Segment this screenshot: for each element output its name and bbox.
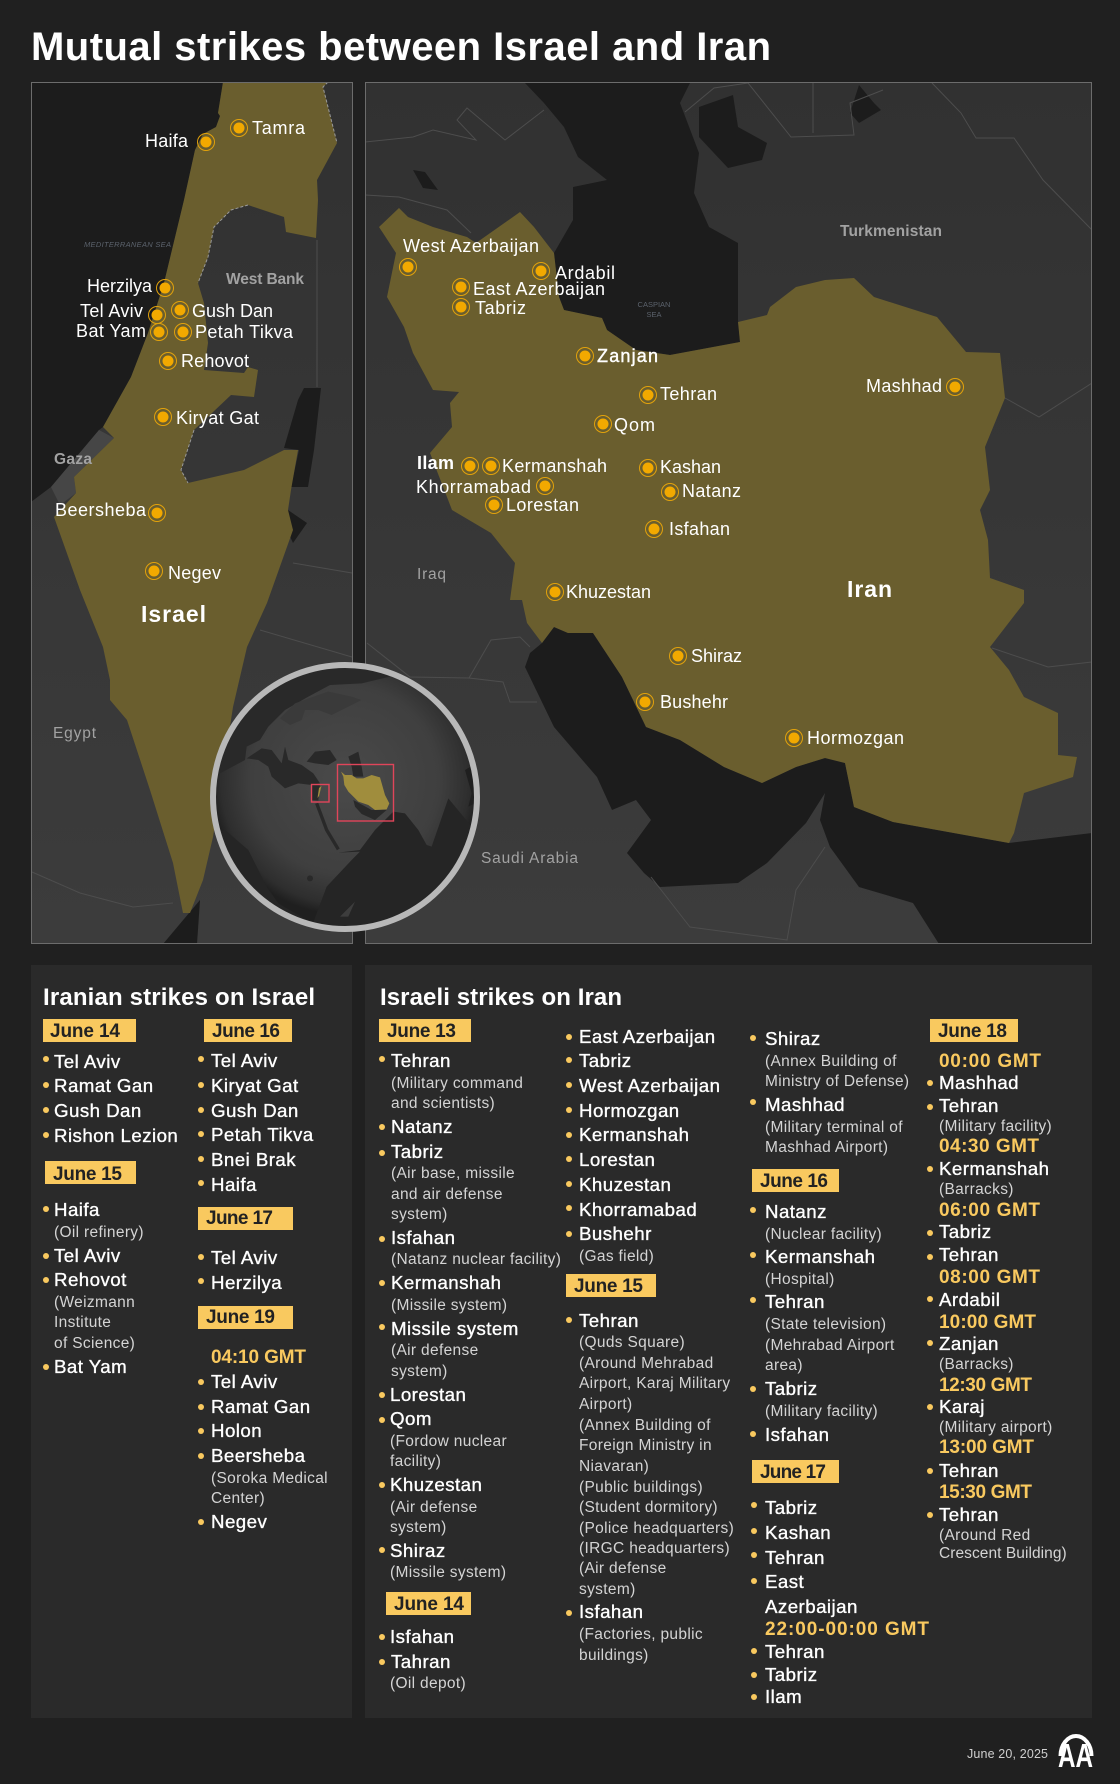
list: June 16 bbox=[750, 1169, 895, 1445]
marker group: Israeli cities: Tel Aviv bbox=[80, 301, 143, 321]
list: June 15: (Factories, public bbox=[579, 1626, 703, 1643]
list: June 15: Ministry of Defense) bbox=[765, 1073, 909, 1090]
list: June 18: (Barracks) bbox=[939, 1181, 1014, 1198]
marker group: Iranian cities: Qom bbox=[614, 415, 655, 435]
list: June 19: 04:10 GMT bbox=[211, 1347, 306, 1368]
list: June 14: Rishon Lezion bbox=[54, 1125, 178, 1146]
marker group: Israeli cities: Haifa bbox=[145, 131, 189, 151]
list: June 13 first column: (Military command bbox=[391, 1075, 523, 1092]
locator box: Israel bbox=[312, 784, 329, 802]
marker group: Iranian cities bbox=[400, 236, 964, 748]
list: June 15: Bat Yam bbox=[54, 1356, 127, 1377]
list: June 13 first column bbox=[379, 1019, 561, 1581]
neighbour labels: Gaza bbox=[54, 451, 92, 468]
list: June 15: Institute bbox=[54, 1314, 111, 1331]
list: June 15: (IRGC headquarters) bbox=[579, 1540, 730, 1557]
list: June 19: Beersheba bbox=[211, 1445, 306, 1466]
list: June 16: Natanz bbox=[765, 1201, 827, 1222]
list: June 13 first column: system) bbox=[391, 1363, 448, 1380]
marker group: Israeli cities: Negev bbox=[168, 563, 221, 583]
list: June 13 continued: East Azerbaijan bbox=[579, 1026, 716, 1047]
list: June 16: Bnei Brak bbox=[211, 1149, 296, 1170]
list: June 13 continued: Kermanshah bbox=[579, 1124, 689, 1145]
list: June 16: Haifa bbox=[211, 1174, 257, 1195]
list: June 15: Rehovot bbox=[54, 1269, 127, 1290]
list: June 13 first column: Tehran bbox=[391, 1050, 451, 1071]
list: June 13 first column: Khuzestan bbox=[390, 1474, 482, 1495]
list: June 18: Zanjan bbox=[939, 1333, 999, 1354]
list: June 13 first column: Natanz bbox=[391, 1116, 453, 1137]
list: June 17: Tehran bbox=[765, 1641, 825, 1662]
list: June 18: Mashhad bbox=[939, 1072, 1019, 1093]
list: June 16 bbox=[198, 1019, 314, 1195]
inset globe bbox=[205, 660, 482, 930]
marker group: Iranian cities: Lorestan bbox=[506, 495, 579, 515]
list: June 15: of Science) bbox=[54, 1335, 135, 1352]
heading: Israeli strikes on Iran bbox=[380, 984, 622, 1011]
list: June 19: June 19 bbox=[206, 1307, 275, 1328]
marker group: Iranian cities: Kermanshah bbox=[502, 456, 607, 476]
list: June 14 bbox=[379, 1592, 471, 1692]
list: June 15: June 15 bbox=[574, 1276, 643, 1297]
list: June 13 first column: facility) bbox=[390, 1453, 441, 1470]
list: June 16: (Nuclear facility) bbox=[765, 1226, 882, 1243]
list: June 18: Tehran bbox=[939, 1095, 999, 1116]
sea label: SEA bbox=[646, 310, 662, 319]
list: June 18: 10:00 GMT bbox=[939, 1312, 1036, 1333]
marker group: Israeli cities: Beersheba bbox=[55, 500, 147, 520]
list: June 17 bbox=[751, 1460, 929, 1707]
locator box: Iran bbox=[338, 764, 394, 821]
list: June 17: Kashan bbox=[765, 1522, 831, 1543]
marker group: Iranian cities: Tehran bbox=[660, 384, 717, 404]
list: June 18: Tehran bbox=[939, 1244, 999, 1265]
list: June 16: (Military facility) bbox=[765, 1403, 878, 1420]
list: June 16: (State television) bbox=[765, 1316, 886, 1333]
marker group: Iranian cities: East Azerbaijan bbox=[473, 279, 605, 299]
globe: Iran highlight bbox=[341, 772, 389, 810]
list: June 15: (Air defense bbox=[579, 1560, 667, 1577]
list: June 13 first column: system) bbox=[390, 1519, 447, 1536]
list: June 13 continued: Tabriz bbox=[579, 1050, 632, 1071]
list: June 14: Ramat Gan bbox=[54, 1075, 154, 1096]
marker group: Iranian cities: Kashan bbox=[660, 457, 721, 477]
marker group: Iranian cities: Ilam bbox=[417, 453, 454, 473]
list: June 13 continued: Hormozgan bbox=[579, 1100, 680, 1121]
list: June 18: Tehran bbox=[939, 1460, 999, 1481]
list: June 15: (Around Mehrabad bbox=[579, 1355, 714, 1372]
list: June 15: Haifa bbox=[54, 1199, 100, 1220]
sea label: MEDITERRANEAN SEA bbox=[84, 240, 171, 249]
marker group: Israeli cities: Tamra bbox=[252, 118, 306, 138]
list: June 13 first column: and scientists) bbox=[391, 1095, 495, 1112]
marker group: Israeli cities: Gush Dan bbox=[192, 301, 273, 321]
list: June 15 bbox=[43, 1161, 144, 1377]
country label: Israel: Israel bbox=[141, 601, 206, 627]
marker group: Israeli cities: Petah Tikva bbox=[195, 322, 294, 342]
marker group: Israeli cities: Herzilya bbox=[87, 276, 153, 296]
list: June 16: Petah Tikva bbox=[211, 1124, 314, 1145]
list: June 13 continued: Lorestan bbox=[579, 1149, 655, 1170]
list: June 15: Mashhad bbox=[765, 1094, 845, 1115]
list: June 13 first column: system) bbox=[391, 1206, 448, 1223]
list: June 13 first column: (Missile system) bbox=[391, 1297, 507, 1314]
list: June 19: Center) bbox=[211, 1490, 265, 1507]
list: June 15: Foreign Ministry in bbox=[579, 1437, 712, 1454]
list: June 19 bbox=[198, 1306, 328, 1532]
marker group: Iranian cities: Shiraz bbox=[691, 646, 742, 666]
list: June 17: Azerbaijan bbox=[765, 1596, 858, 1617]
list: June 13 first column: Shiraz bbox=[390, 1540, 446, 1561]
list: June 16: Gush Dan bbox=[211, 1100, 299, 1121]
neighbour labels: Egypt bbox=[53, 725, 97, 742]
Iran territory bbox=[379, 208, 1077, 843]
list: June 19: Holon bbox=[211, 1420, 262, 1441]
list: June 16: June 16 bbox=[212, 1021, 280, 1042]
list: June 18: 13:00 GMT bbox=[939, 1437, 1034, 1458]
list: June 16: Kiryat Gat bbox=[211, 1075, 299, 1096]
list: June 19: Ramat Gan bbox=[211, 1396, 311, 1417]
marker group: Israeli cities: Kiryat Gat bbox=[176, 408, 259, 428]
marker group: Iranian cities: West Azerbaijan bbox=[403, 236, 539, 256]
list: June 18: 04:30 GMT bbox=[939, 1136, 1039, 1157]
list: June 15: Airport) bbox=[579, 1396, 632, 1413]
list: June 17: East bbox=[765, 1571, 805, 1592]
list: June 18: Tabriz bbox=[939, 1221, 992, 1242]
list: June 15: Airport, Karaj Military bbox=[579, 1375, 730, 1392]
marker group: Iranian cities: Zanjan bbox=[597, 346, 658, 366]
list: June 15: Tehran bbox=[579, 1310, 639, 1331]
marker group: Israeli cities: Rehovot bbox=[181, 351, 249, 371]
marker group: Iranian cities: Mashhad bbox=[866, 376, 942, 396]
title: Mutual strikes between Israel and Iran bbox=[31, 25, 771, 69]
list: June 18: 06:00 GMT bbox=[939, 1200, 1040, 1221]
list: June 15: (Quds Square) bbox=[579, 1334, 685, 1351]
list: June 13 first column: (Air defense bbox=[391, 1342, 479, 1359]
country label: Iran: Iran bbox=[847, 576, 892, 602]
sea label bbox=[638, 300, 670, 319]
marker group: Iranian cities: Hormozgan bbox=[807, 728, 904, 748]
list: June 15: buildings) bbox=[579, 1647, 649, 1664]
list: June 14: Isfahan bbox=[390, 1626, 454, 1647]
list: June 17: Ilam bbox=[765, 1686, 802, 1707]
list: June 15: system) bbox=[579, 1581, 636, 1598]
list: June 15: Isfahan bbox=[579, 1601, 643, 1622]
list: June 15: (Weizmann bbox=[54, 1294, 135, 1311]
list: June 18: (Around Red bbox=[939, 1527, 1031, 1544]
list: June 13 continued bbox=[566, 1026, 720, 1265]
list: June 13 continued: Khorramabad bbox=[579, 1199, 697, 1220]
list: June 15: Tel Aviv bbox=[54, 1245, 121, 1266]
list: June 16: area) bbox=[765, 1357, 803, 1374]
Israel territory bbox=[54, 82, 337, 913]
list: June 13 first column: June 13 bbox=[387, 1021, 456, 1042]
list: June 14 bbox=[43, 1019, 178, 1146]
list: June 15: (Public buildings) bbox=[579, 1479, 703, 1496]
list: June 17: June 17 bbox=[760, 1462, 826, 1483]
marker group: Iranian cities: Isfahan bbox=[669, 519, 730, 539]
list: June 15: Shiraz bbox=[765, 1028, 821, 1049]
list: June 15 bbox=[566, 1028, 909, 1664]
neighbour labels bbox=[417, 223, 942, 867]
list: June 16: Tabriz bbox=[765, 1378, 818, 1399]
list: June 17: 22:00-00:00 GMT bbox=[765, 1619, 929, 1640]
heading: Iranian strikes on Israel bbox=[43, 984, 315, 1011]
list: June 16: (Mehrabad Airport bbox=[765, 1337, 895, 1354]
list: June 14: June 14 bbox=[394, 1594, 464, 1615]
list: June 14: Tahran bbox=[391, 1651, 451, 1672]
list: June 18: Tehran bbox=[939, 1504, 999, 1525]
list: June 13 first column: Kermanshah bbox=[391, 1272, 501, 1293]
list: June 18: 08:00 GMT bbox=[939, 1267, 1040, 1288]
marker group: Israeli cities bbox=[55, 118, 306, 583]
panel: Iranian strikes on Israel bbox=[31, 965, 352, 1718]
list: June 15: Mashhad Airport) bbox=[765, 1139, 888, 1156]
panel: Israeli strikes on Iran bbox=[365, 965, 1092, 1718]
list: June 18: Karaj bbox=[939, 1396, 985, 1417]
neighbour labels: Turkmenistan bbox=[840, 223, 942, 240]
list: June 13 first column: (Missile system) bbox=[390, 1564, 506, 1581]
list: June 15: June 15 bbox=[53, 1164, 122, 1185]
list: June 18: 12:30 GMT bbox=[939, 1375, 1032, 1396]
list: June 17 bbox=[198, 1207, 293, 1293]
list: June 17: Herzilya bbox=[211, 1272, 282, 1293]
marker group: Iranian cities: Tabriz bbox=[475, 298, 526, 318]
list: June 16: Kermanshah bbox=[765, 1246, 875, 1267]
list: June 13 continued: (Gas field) bbox=[579, 1248, 654, 1265]
list: June 13 first column: (Air base, missile bbox=[391, 1165, 515, 1182]
neighbour labels bbox=[53, 271, 304, 742]
sea label: CASPIAN bbox=[638, 300, 670, 309]
list: June 14: Gush Dan bbox=[54, 1100, 142, 1121]
date: June 20, 2025 bbox=[967, 1747, 1048, 1761]
list: June 16: Tehran bbox=[765, 1291, 825, 1312]
list: June 19: Tel Aviv bbox=[211, 1371, 278, 1392]
list: June 13 continued: Bushehr bbox=[579, 1223, 652, 1244]
list: June 15: (Oil refinery) bbox=[54, 1224, 144, 1241]
list: June 14: (Oil depot) bbox=[390, 1675, 466, 1692]
marker group: Iranian cities: Natanz bbox=[682, 481, 741, 501]
list: June 13 first column: Missile system bbox=[391, 1318, 519, 1339]
list: June 14: Tel Aviv bbox=[54, 1051, 121, 1072]
list: June 16: June 16 bbox=[760, 1171, 828, 1192]
list: June 13 first column: (Natanz nuclear facility) bbox=[391, 1251, 561, 1268]
list: June 13 continued: West Azerbaijan bbox=[579, 1075, 720, 1096]
globe: Israel highlight bbox=[318, 786, 322, 798]
list: June 18 bbox=[927, 1019, 1067, 1562]
list: June 13 first column: Isfahan bbox=[391, 1227, 455, 1248]
list: June 13 first column: (Fordow nuclear bbox=[390, 1433, 507, 1450]
list: June 18: 00:00 GMT bbox=[939, 1051, 1041, 1072]
list: June 18: Kermanshah bbox=[939, 1158, 1049, 1179]
list: June 13 first column: and air defense bbox=[391, 1186, 503, 1203]
list: June 18: (Barracks) bbox=[939, 1356, 1014, 1373]
list: June 18: Crescent Building) bbox=[939, 1545, 1067, 1562]
list: June 19: (Soroka Medical bbox=[211, 1470, 328, 1487]
marker group: Iranian cities: Ardabil bbox=[555, 263, 615, 283]
list: June 13 continued: Khuzestan bbox=[579, 1174, 671, 1195]
marker group: Iranian cities: Khorramabad bbox=[416, 477, 531, 497]
list: June 13 first column: (Air defense bbox=[390, 1499, 478, 1516]
list: June 16: (Hospital) bbox=[765, 1271, 835, 1288]
list: June 18: Ardabil bbox=[939, 1289, 1000, 1310]
neighbour labels: West Bank bbox=[226, 271, 304, 288]
list: June 15: (Police headquarters) bbox=[579, 1520, 734, 1537]
marker group: Iranian cities: Khuzestan bbox=[566, 582, 651, 602]
list: June 18: 15:30 GMT bbox=[939, 1482, 1032, 1503]
list: June 16: Isfahan bbox=[765, 1424, 829, 1445]
list: June 18: (Military airport) bbox=[939, 1419, 1053, 1436]
list: June 16: Tel Aviv bbox=[211, 1050, 278, 1071]
list: June 19: Negev bbox=[211, 1511, 267, 1532]
neighbour labels: Iraq bbox=[417, 566, 446, 583]
list: June 17: June 17 bbox=[206, 1208, 273, 1229]
list: June 17: Tabriz bbox=[765, 1497, 818, 1518]
list: June 13 first column: Qom bbox=[390, 1408, 432, 1429]
list: June 15: Niavaran) bbox=[579, 1458, 649, 1475]
logo: AA: AA bbox=[1058, 1737, 1093, 1774]
list: June 14: June 14 bbox=[50, 1021, 120, 1042]
list: June 15: (Annex Building of bbox=[765, 1053, 897, 1070]
list: June 17: Tehran bbox=[765, 1547, 825, 1568]
list: June 15: (Annex Building of bbox=[579, 1417, 711, 1434]
neighbour labels: Saudi Arabia bbox=[481, 850, 578, 867]
list: June 13 first column: Tabriz bbox=[391, 1141, 444, 1162]
marker group: Israeli cities: Bat Yam bbox=[76, 321, 146, 341]
list: June 18: (Military facility) bbox=[939, 1118, 1052, 1135]
list: June 18: June 18 bbox=[938, 1021, 1007, 1042]
panel: Israel map bbox=[31, 82, 352, 944]
list: June 15: (Student dormitory) bbox=[579, 1499, 718, 1516]
list: June 17: Tabriz bbox=[765, 1664, 818, 1685]
list: June 13 first column: Lorestan bbox=[390, 1384, 466, 1405]
list: June 17: Tel Aviv bbox=[211, 1247, 278, 1268]
marker group: Iranian cities: Bushehr bbox=[660, 692, 728, 712]
panel: Iran map bbox=[365, 82, 1092, 944]
list: June 15: (Military terminal of bbox=[765, 1119, 903, 1136]
